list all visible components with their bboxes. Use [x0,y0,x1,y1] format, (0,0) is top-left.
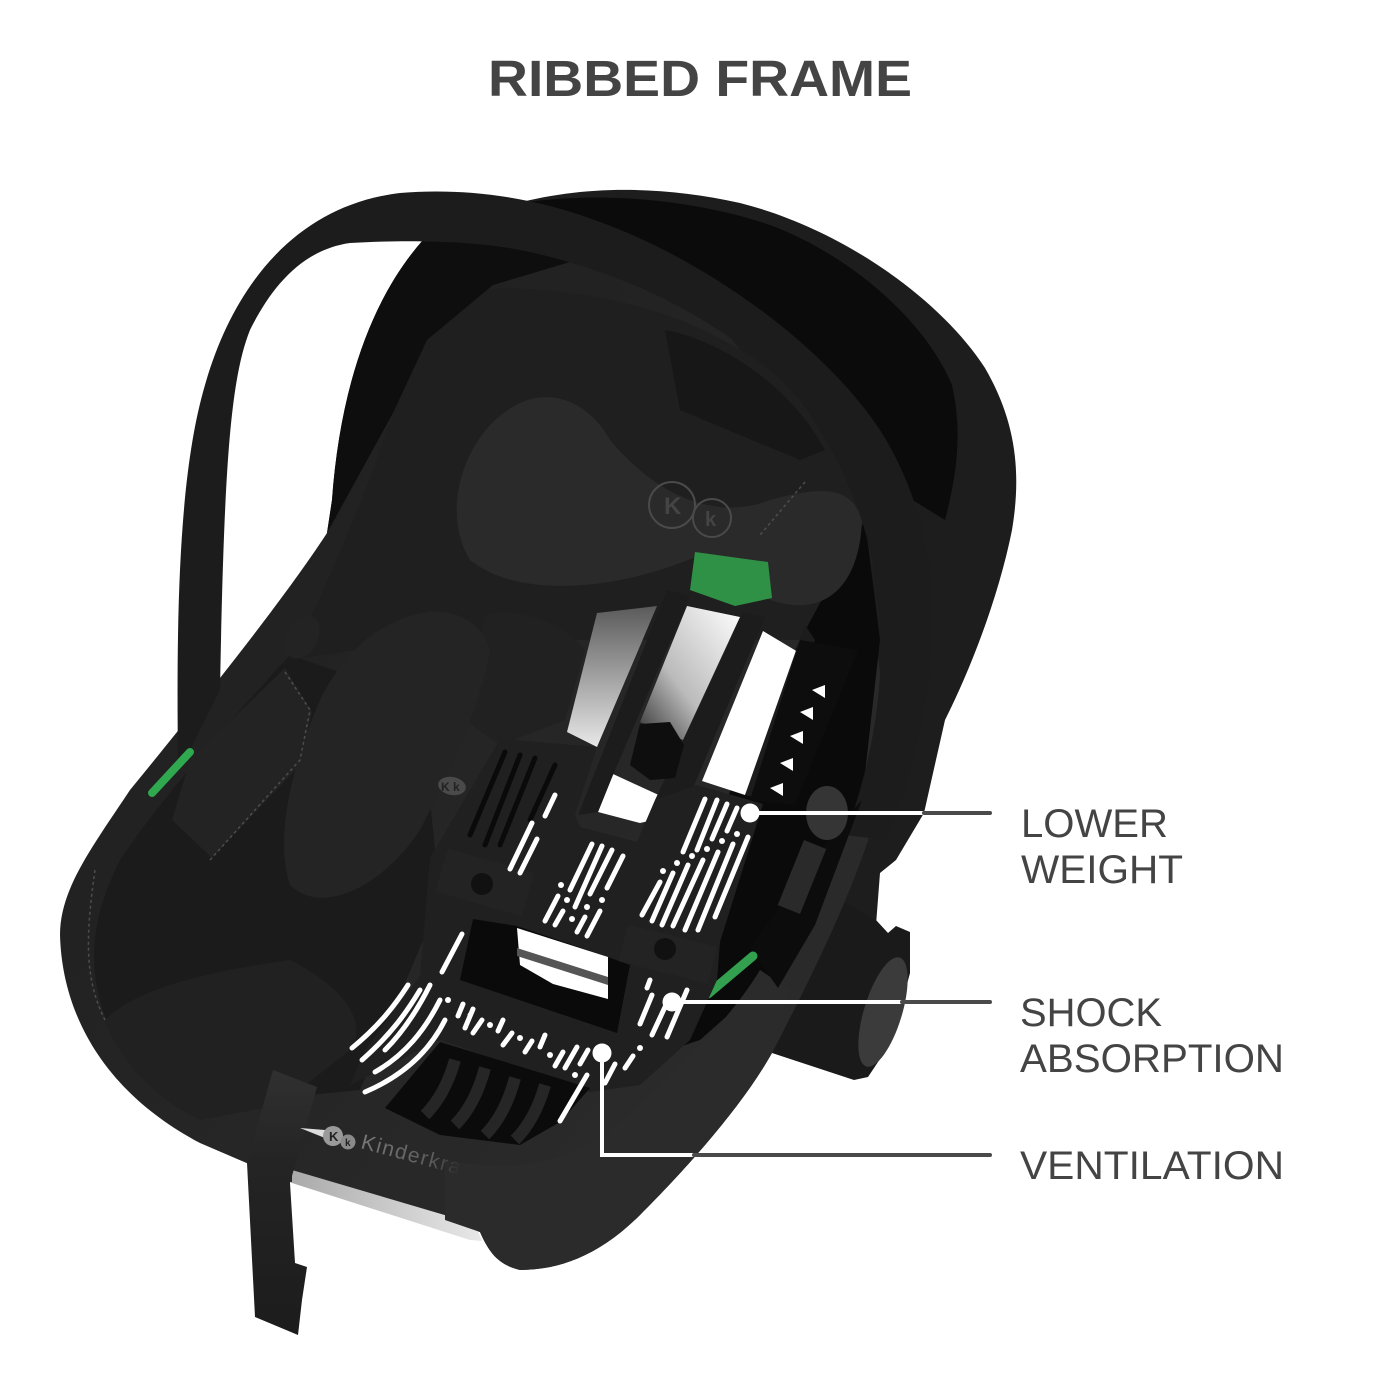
shoulder pad [465,612,585,745]
white window in opening [517,928,608,999]
rear interior dark [327,240,570,533]
black central opening [460,919,630,1033]
upper right shadow panel [665,330,825,460]
seat stitching [88,482,805,1020]
brand logo on shell: Kinderkra [359,1131,463,1179]
seat back fabric [290,288,880,660]
green harness clip [690,552,772,606]
shell body [60,235,890,1270]
brand logo on shell: k [345,1138,351,1149]
brand emblem on headrest: k [705,509,717,531]
car seat illustration [60,190,1016,1335]
wing fabric patch [172,668,312,858]
right hub [619,924,717,984]
brand emblem on headrest [649,482,731,537]
left green tab [152,752,190,793]
callout: shock absorption: ABSORPTION [1020,1037,1284,1081]
wheel [772,900,918,1080]
left hub [435,848,534,917]
rib frame rails [578,590,815,820]
callout: shock absorption: SHOCK [1020,991,1162,1035]
white frame windows [567,606,803,823]
headrest [457,397,862,605]
brand logo on shell: K [329,1129,339,1144]
white rib slots [352,795,748,1121]
canopy [480,190,1016,1053]
bottom chrome trim [292,1170,482,1241]
callout: shock absorption [662,991,1284,1081]
dark slots left panel [470,752,555,845]
callout: lower weight [740,802,1183,892]
brand logo on shell [300,1126,463,1179]
small logo on cushion: K k [441,780,460,794]
bottom ribbed recess [385,1042,590,1145]
carry handle [178,192,933,840]
seat pull strap [247,1070,317,1335]
callout: ventilation [592,1044,1284,1188]
seat base cushion [105,960,356,1120]
white rib dots [445,831,740,1078]
small logo on cushion [437,775,467,797]
brand emblem on headrest: K [664,493,682,520]
left seat wing [94,655,440,1100]
canopy interior [510,198,958,520]
right inner side [640,520,880,1060]
right strut compartment [750,786,862,988]
handle pivot button [277,609,327,665]
right green tab [708,956,753,994]
callout: lower weight: LOWER [1021,802,1168,846]
callout: ventilation: VENTILATION [1020,1144,1284,1188]
buckle [630,722,684,780]
side vent slats [750,640,858,805]
lower front rim [445,970,790,1270]
title: RIBBED FRAME [488,50,912,107]
side cushion [284,612,490,898]
frame lower structure [350,739,763,1092]
callout: lower weight: WEIGHT [1021,848,1183,892]
